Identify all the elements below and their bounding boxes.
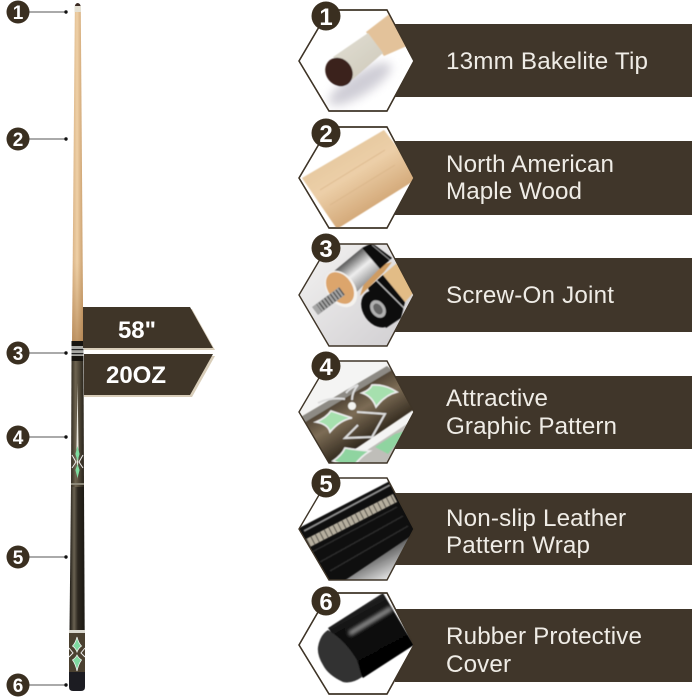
feature row 4: pattern [299,352,692,472]
label bar [395,258,692,332]
feature row 1: tip [299,2,692,112]
weight arrow tag [84,354,215,397]
number badge [312,586,340,616]
number badge: 3 [319,236,333,263]
maple shaft [72,12,83,345]
number badge [312,352,340,381]
number badge: 1 [319,4,333,31]
cue tip [74,3,81,8]
butt inlay [69,633,85,672]
label bar [395,376,692,449]
feature row 3: joint [299,234,692,346]
left callout 6 [6,674,68,697]
label bar [395,493,692,565]
label text [446,623,642,678]
length arrow tag: 58" [118,317,156,344]
label text: Cover [446,651,511,678]
label text [446,505,626,559]
hexagon photo: screw joint [299,243,416,346]
label text: Attractive [446,385,548,412]
label bar [395,141,692,215]
number badge: 6 [319,589,333,616]
number badge: 2 [319,121,333,148]
label text: Rubber Protective [446,623,642,650]
number badge [312,468,340,498]
left callout 1: 1 [13,3,24,24]
left callout 3: 3 [13,344,23,365]
hexagon photo: leather wrap [298,477,414,581]
feature row 2: shaft [299,118,692,229]
label bar [395,609,692,682]
label text: Maple Wood [446,178,582,205]
left callout 5: 5 [13,548,24,569]
number badge: 5 [319,471,333,498]
label text: Pattern Wrap [446,532,590,559]
length arrow tag [83,307,215,350]
number badge [312,234,340,263]
label bar [395,24,692,97]
forearm with inlays [71,361,84,487]
left callout 4 [6,426,68,449]
left callout 3 [6,342,68,365]
upper cue [360,262,392,296]
left callout 2: 2 [13,130,23,151]
pool cue illustration [69,3,85,691]
label text: Non-slip Leather [446,505,626,532]
number badge [312,118,340,148]
hexagon photo: graphic pattern [299,361,416,472]
hexagon photo: maple wood [299,127,420,229]
left callout 6: 6 [13,676,23,697]
weight arrow tag: 20OZ [106,362,166,389]
label text [446,151,614,205]
lower cue [383,263,416,302]
number badge [312,2,340,31]
joint rings [72,341,84,361]
leather wrap handle [70,487,85,630]
rubber bumper [69,672,85,691]
label text: 13mm Bakelite Tip [446,48,648,75]
left callout 1 [6,0,68,24]
left callout 5 [6,546,68,569]
left callout 2 [6,128,68,151]
feature row 6: bumper [299,586,692,694]
number badge: 4 [319,354,333,381]
label text [446,385,617,440]
hexagon photo: rubber cover [299,593,414,694]
feature row 5: wrap [295,468,692,590]
left callout 4: 4 [13,428,24,449]
hexagon photo: tip [299,10,416,112]
label text: North American [446,151,614,178]
label text: Graphic Pattern [446,413,617,440]
white band [69,630,85,633]
label text: Screw-On Joint [446,282,614,309]
